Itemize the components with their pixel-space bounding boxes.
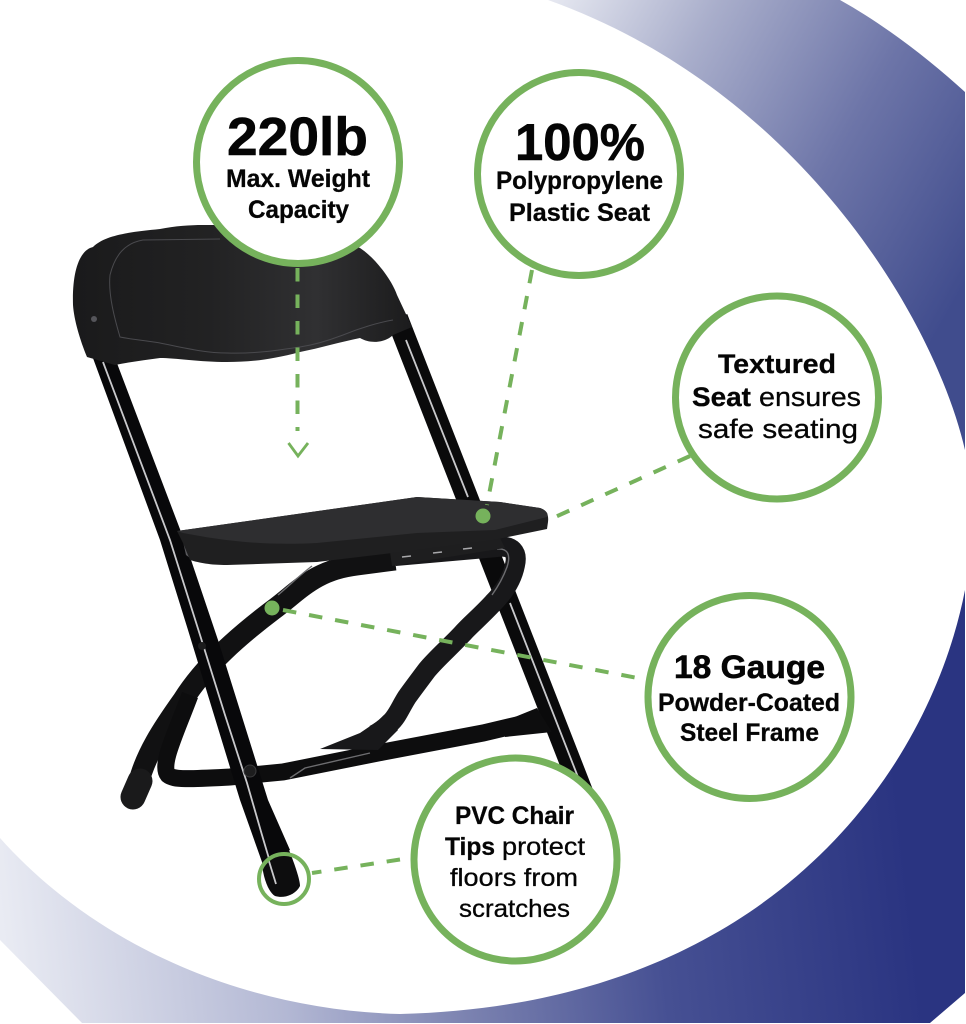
callout: chair tips: PVC Chair — [455, 802, 574, 830]
callout: textured seat: Seat — [692, 382, 751, 412]
callout: chair tips: floors from — [450, 864, 578, 892]
callout: textured seat: safe seating — [698, 414, 858, 444]
callout: steel frame — [648, 596, 851, 798]
chair seat brackets — [390, 538, 505, 566]
callout: polypropylene: 100% — [515, 114, 645, 172]
callout: steel frame: Steel Frame — [680, 719, 819, 747]
chair right leg — [397, 318, 600, 838]
chair backrest — [73, 225, 412, 365]
callout: weight capacity: Max. Weight — [226, 165, 371, 193]
callout: polypropylene: Plastic Seat — [509, 199, 651, 227]
return tube taper — [320, 716, 398, 750]
leader line: weight — [296, 268, 300, 431]
chair photo — [73, 225, 600, 897]
callout: chair tips — [414, 758, 617, 961]
arrow head: weight — [288, 443, 308, 456]
chair seat — [177, 497, 548, 565]
marker dot: seat — [476, 508, 490, 524]
background band: bottom — [0, 590, 965, 1023]
marker ring: chair tip — [259, 854, 309, 904]
callout: textured seat — [676, 296, 878, 499]
chair front tube arc — [138, 560, 395, 785]
callout: weight capacity — [196, 60, 400, 264]
callout: steel frame: Powder-Coated — [658, 689, 840, 717]
callout: weight capacity: Capacity — [248, 196, 349, 224]
leader line: frame — [283, 610, 648, 680]
chair left leg — [90, 350, 290, 862]
callout: polypropylene: Polypropylene — [496, 167, 663, 195]
chair return tube — [374, 547, 516, 735]
chair left foot cap — [133, 781, 140, 797]
callout: textured seat: Textured — [718, 349, 836, 379]
callout: textured seat: ensures — [759, 382, 861, 412]
chair joint bolts — [244, 765, 256, 777]
callout: chair tips: protect — [502, 833, 585, 861]
background band: top right — [548, 0, 965, 450]
callout: steel frame: 18 Gauge — [674, 649, 825, 685]
chair bottom crossbar — [166, 695, 530, 779]
leader line: chair tips — [312, 860, 400, 873]
callout: chair tips: Tips — [445, 833, 495, 861]
crossbar flare — [505, 708, 552, 737]
chair right foot tip — [262, 850, 300, 897]
callout: weight capacity: 220lb — [227, 107, 368, 167]
marker dot: frame — [264, 600, 280, 616]
callout: chair tips: scratches — [459, 895, 570, 923]
leader line: plastic seat — [487, 270, 532, 505]
callout: polypropylene — [478, 72, 680, 276]
leader line: textured seat — [553, 456, 690, 518]
